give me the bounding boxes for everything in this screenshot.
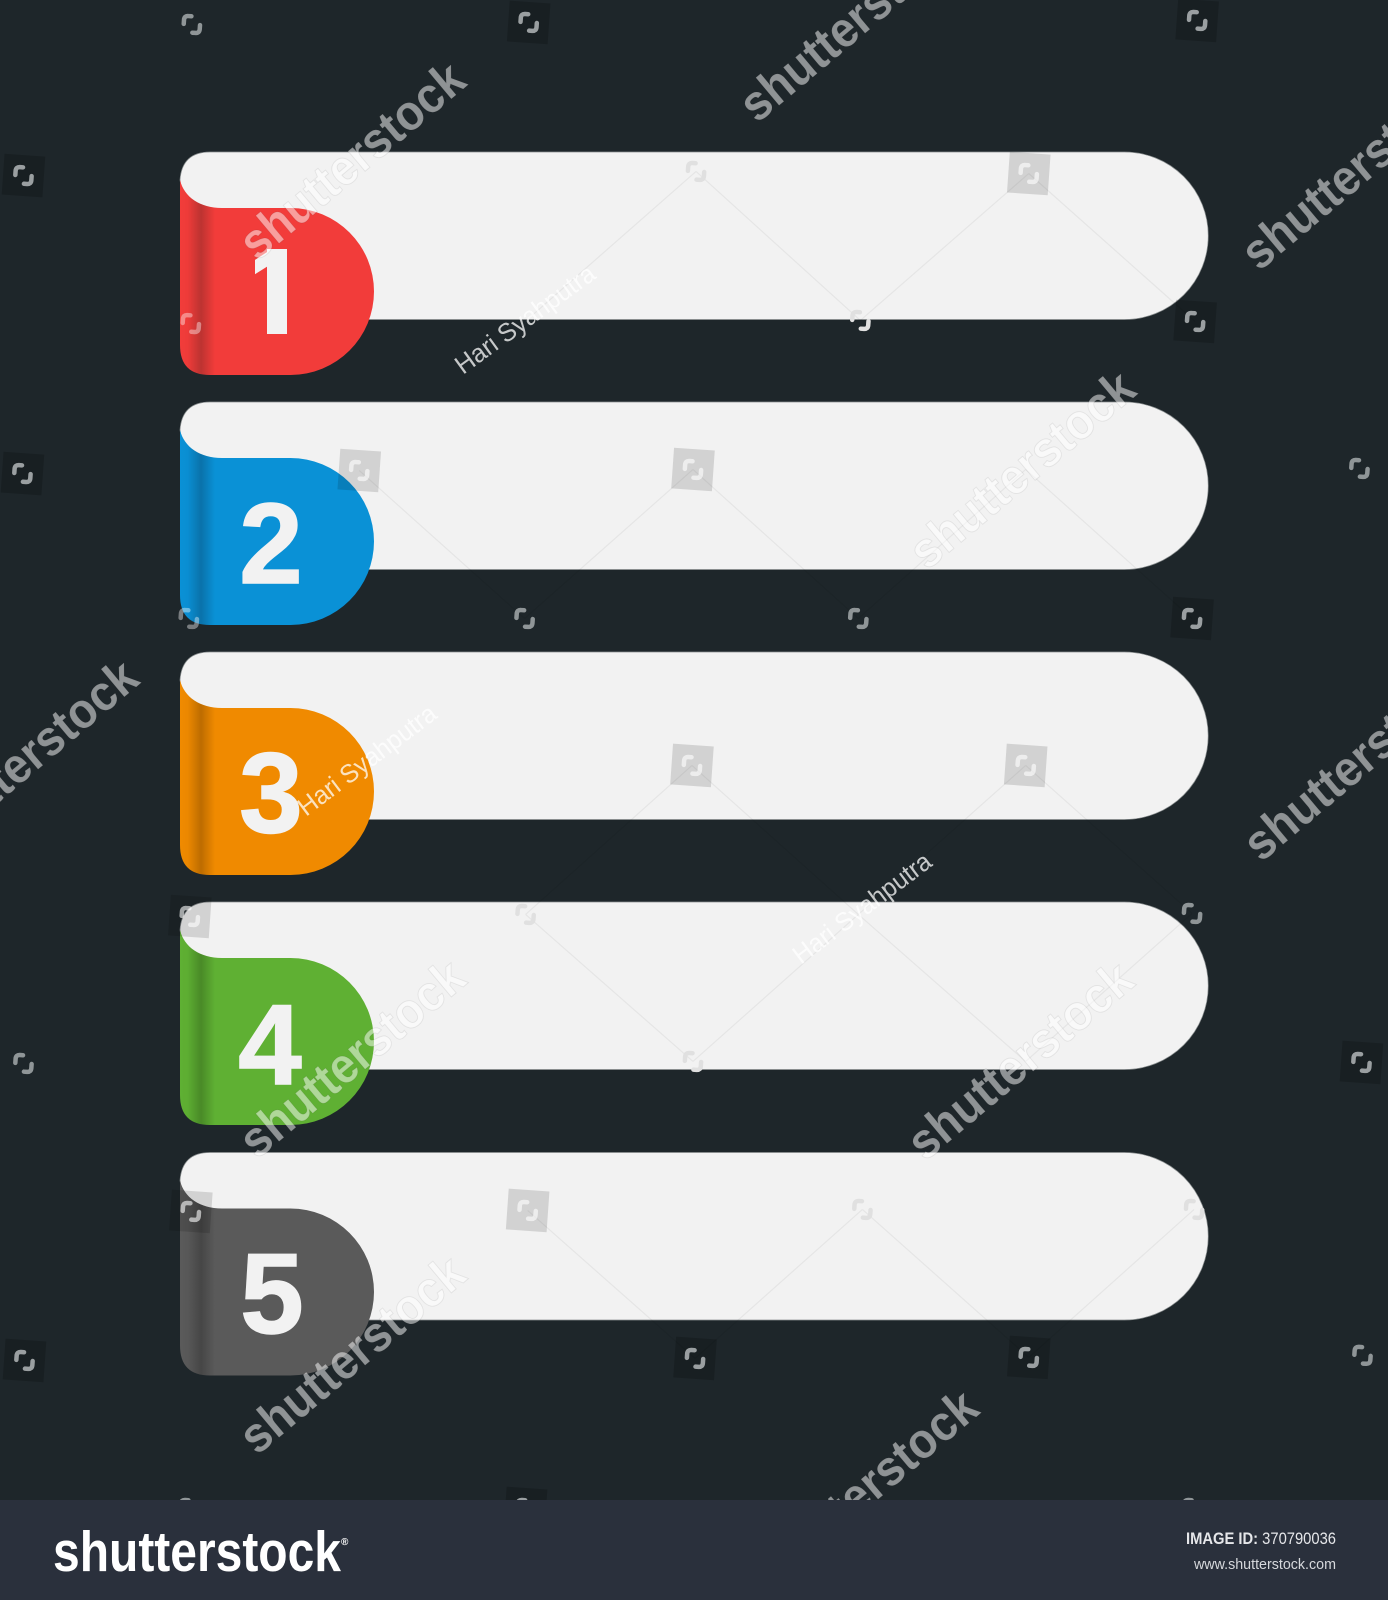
footer logo: shutterstock: [53, 1520, 341, 1584]
shutterstock text watermarks: shutterstock: [228, 948, 476, 1168]
banner 2: [180, 402, 1208, 625]
faint watermark lattice lines: [359, 171, 1195, 1358]
banner 5: [180, 1152, 1208, 1376]
banner 3 white bar: [180, 652, 1208, 820]
banner 1: [180, 152, 1208, 375]
number 1: 1: [242, 228, 306, 355]
banner 5 white bar: [180, 1152, 1208, 1320]
website: www.shutterstock.com: [1193, 1556, 1336, 1573]
number 5: 5: [240, 1231, 304, 1358]
number 4: 4: [238, 982, 302, 1109]
banner 4 white bar: [180, 902, 1208, 1070]
author watermarks: [292, 258, 938, 970]
author watermarks: Hari Syahputra: [787, 846, 938, 970]
banner 5 gray tab: [180, 1180, 374, 1376]
banner 1 red tab: [180, 180, 374, 375]
number 2: 2: [239, 481, 303, 608]
image id: IMAGE ID: 370790036: [1186, 1529, 1336, 1548]
banner 4: [180, 902, 1208, 1125]
author watermarks: Hari Syahputra: [449, 258, 601, 380]
shutterstock text watermarks: shutterstock: [228, 50, 476, 270]
banner 2 blue tab: [180, 430, 374, 625]
banner 3 orange tab: [180, 680, 374, 875]
shutterstock text watermarks: shutterstock: [898, 359, 1146, 579]
banner 1 white bar: [180, 152, 1208, 320]
footer bar: [0, 1500, 1388, 1600]
footer logo: ®: [341, 1537, 349, 1548]
banner 4 green tab: [180, 930, 374, 1125]
banner 2 white bar: [180, 402, 1208, 570]
number 3: 3: [239, 730, 303, 857]
number 1: [255, 249, 287, 334]
shutterstock text watermarks: shutterstock: [896, 950, 1144, 1170]
shutterstock text watermarks: shutterstock: [228, 1244, 476, 1464]
shutterstock text watermarks: shutterstock: [741, 1378, 989, 1598]
banner 3: [180, 652, 1208, 875]
author watermarks: Hari Syahputra: [292, 698, 443, 822]
